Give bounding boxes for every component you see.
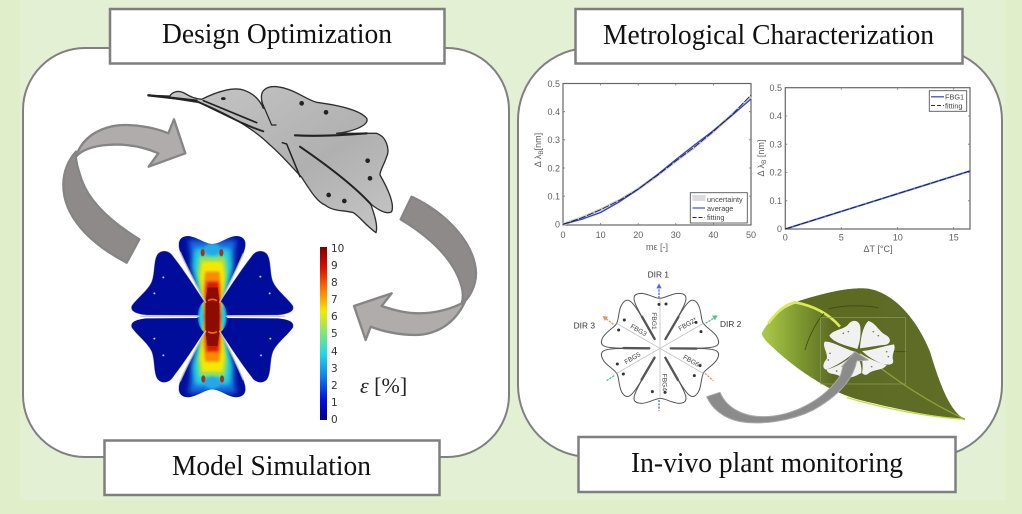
chart: wavelength shift vs temperature: 0.4: [769, 111, 782, 121]
arrow: sensor to leaf: [707, 352, 868, 423]
chart: wavelength shift vs strain: 40: [708, 230, 718, 240]
chart: wavelength shift vs strain: 0: [555, 220, 560, 230]
colorbar legend: 10: [331, 243, 344, 255]
legend: strain chart: [690, 193, 747, 223]
chart: wavelength shift vs strain: [nm]: [533, 133, 543, 150]
chart: wavelength shift vs temperature: 0.5: [769, 83, 782, 93]
heading box: Metrological Characterization: Metrological Characterization: [603, 20, 934, 51]
colorbar legend: 0: [331, 414, 338, 426]
colorbar legend: 7: [331, 294, 338, 306]
colorbar legend: 6: [331, 311, 338, 323]
petal inner edges: [180, 252, 243, 382]
chart: wavelength shift vs strain: 10: [596, 230, 606, 240]
chart: wavelength shift vs temperature: [nm]: [756, 140, 766, 160]
central strain field: [178, 236, 246, 398]
chart: wavelength shift vs strain: 0.1: [547, 192, 560, 202]
legend: temperature chart: FBG1: [945, 92, 964, 102]
heading box: Design Optimization: Design Optimization: [162, 19, 392, 50]
chart: wavelength shift vs strain: Δ λ: [533, 155, 543, 167]
colorbar legend: 5: [331, 328, 338, 340]
chart: wavelength shift vs temperature: Δ λ: [756, 164, 766, 176]
legend: strain chart: average: [707, 204, 733, 213]
chart: wavelength shift vs temperature: 0: [777, 224, 782, 234]
colorbar legend: 8: [331, 277, 338, 289]
legend: strain chart: fitting: [707, 213, 724, 222]
chart: wavelength shift vs strain: 0.3: [547, 135, 560, 145]
petal slits: [624, 317, 696, 380]
chart: wavelength shift vs temperature: [756, 83, 970, 254]
legend: strain chart: uncertainty: [707, 195, 743, 204]
icon: green leaf with sensor: [762, 288, 965, 419]
arrow: design to simulation: [354, 197, 476, 340]
panel: left design and simulation: [23, 48, 509, 457]
FBG labels: FBG2*: [677, 316, 699, 333]
panel: right characterization and monitoring: [518, 48, 1002, 457]
diagram: sensor with FBG directions: [574, 270, 742, 411]
heading box: Model Simulation: Model Simulation: [172, 451, 371, 482]
FBG labels: FBG5: [623, 351, 642, 366]
chart: wavelength shift vs strain: 0.4: [547, 107, 560, 117]
colorbar legend: [320, 243, 344, 426]
chart: wavelength shift vs temperature: 0: [783, 232, 788, 242]
white sensor on leaf: [823, 321, 895, 378]
direction arrows: [602, 283, 718, 411]
chart: wavelength shift vs temperature: 0.3: [769, 140, 782, 150]
petals: [599, 293, 721, 403]
chart: wavelength shift vs strain: 0.5: [547, 79, 560, 89]
colorbar legend: 9: [331, 260, 338, 272]
heading box: Design Optimization: [110, 9, 444, 64]
colorbar legend: 4: [331, 346, 338, 358]
side petals: [131, 251, 293, 382]
strain unit label: ε [%]: [360, 373, 407, 398]
heading box: In-vivo plant monitoring: In-vivo plant monitoring: [631, 448, 903, 479]
chart: wavelength shift vs strain: 0.2: [547, 164, 560, 174]
FBG labels: FBG4*: [661, 374, 668, 394]
chart: wavelength shift vs strain: mε [-]: [646, 242, 668, 252]
chart: wavelength shift vs temperature: 10: [893, 232, 903, 242]
chart: wavelength shift vs strain: B: [538, 150, 545, 155]
heading box: Model Simulation: [104, 440, 440, 495]
colorbar legend: 3: [331, 363, 338, 375]
arrow: simulation to design: [63, 119, 185, 263]
diagram: sensor with FBG directions: DIR 1: [648, 270, 669, 280]
chart: wavelength shift vs strain: 20: [633, 230, 643, 240]
legend: temperature chart: [929, 91, 967, 111]
heading box: In-vivo plant monitoring: [578, 437, 956, 492]
FBG labels: FBG6*: [682, 354, 703, 370]
diagram: sensor with FBG directions: DIR 2: [720, 319, 742, 329]
chart: wavelength shift vs strain: [533, 79, 756, 252]
chart: wavelength shift vs temperature: 5: [839, 232, 844, 242]
chart: wavelength shift vs temperature: ΔT [°C]: [864, 244, 892, 254]
chart: wavelength shift vs temperature: 0.2: [769, 168, 782, 178]
diagram: sensor with FBG directions: DIR 3: [574, 321, 595, 331]
FBG labels: [623, 312, 703, 394]
chart: wavelength shift vs temperature: 15: [949, 232, 959, 242]
chart: wavelength shift vs strain: 30: [671, 230, 681, 240]
FBG labels: FBG1: [650, 312, 657, 330]
heading box: Metrological Characterization: [576, 9, 962, 64]
chart: wavelength shift vs temperature: B: [761, 160, 768, 164]
colorbar legend: 2: [331, 380, 338, 392]
chart: wavelength shift vs strain: 0: [560, 230, 566, 240]
FBG labels: FBG3: [629, 323, 648, 338]
legend: temperature chart: fitting: [945, 102, 962, 110]
chart: strain heat map of sensor: [131, 230, 293, 403]
colorbar legend: 1: [331, 397, 338, 409]
chart: wavelength shift vs strain: 50: [746, 230, 756, 240]
icon: gray deformed leaf-shaped sensor: [148, 87, 392, 233]
chart: wavelength shift vs temperature: 0.1: [769, 196, 782, 206]
